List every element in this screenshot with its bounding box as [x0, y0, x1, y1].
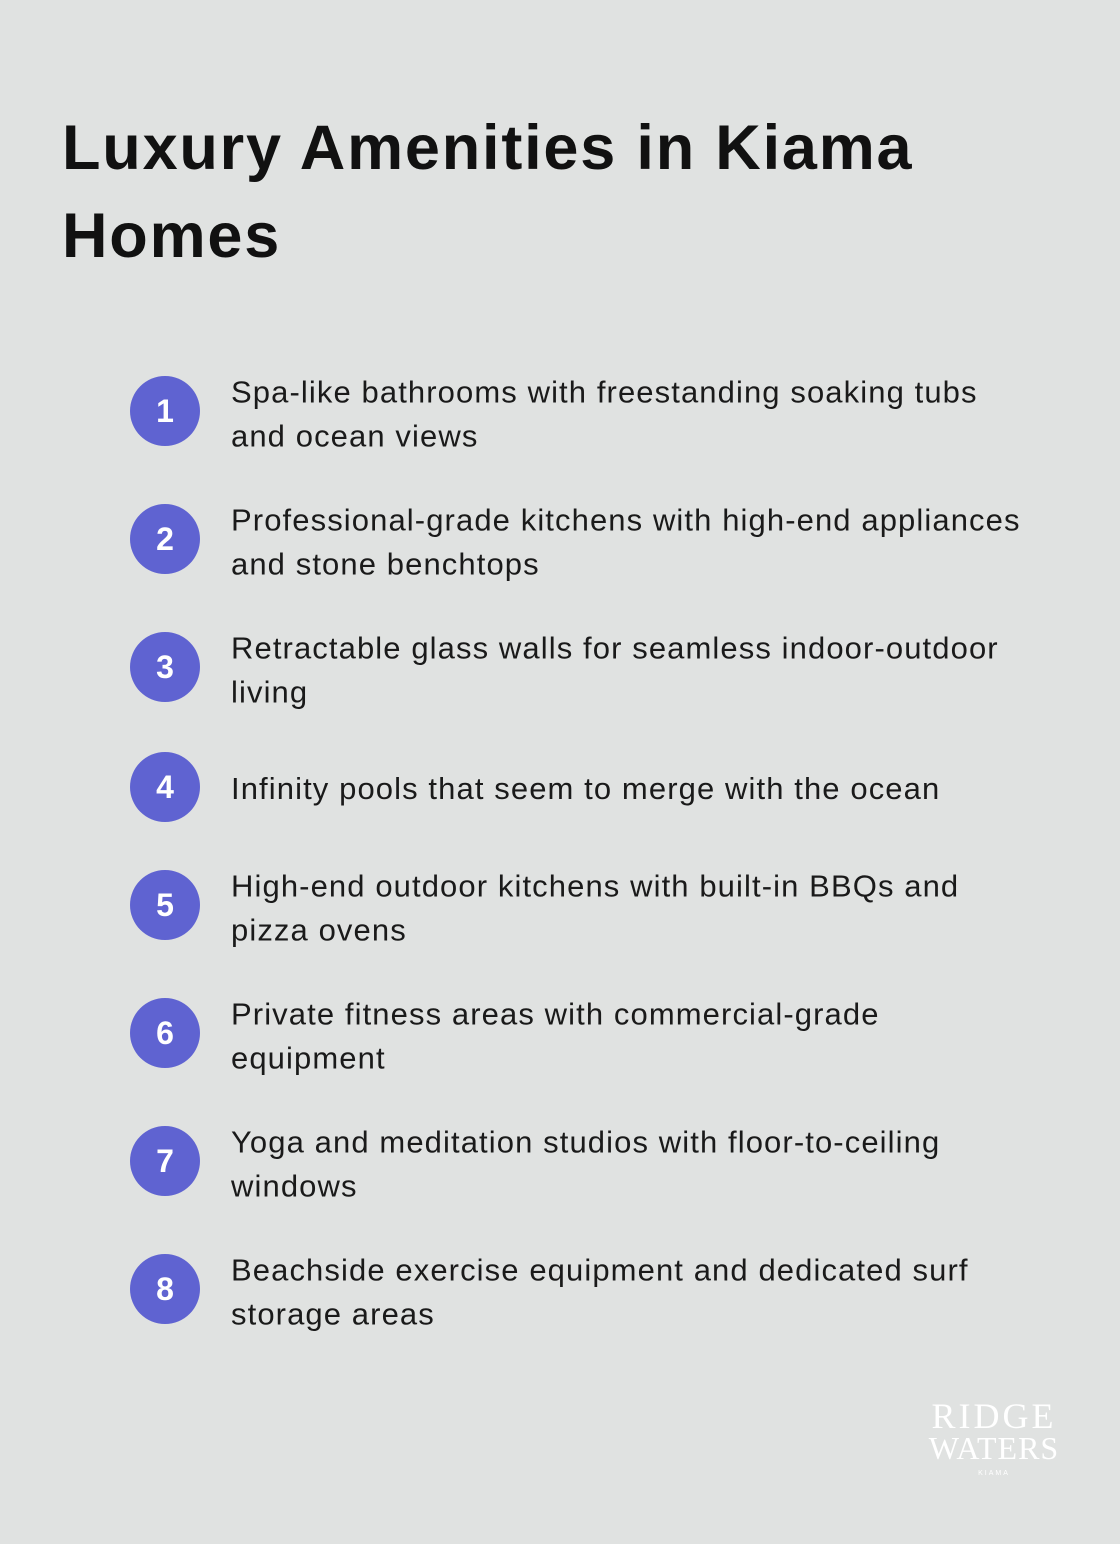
- item 3: [130, 631, 999, 710]
- item 2: 2: [156, 521, 174, 557]
- item 5: pizza ovens: [231, 913, 407, 948]
- title: Luxury Amenities in Kiama: [62, 113, 913, 183]
- item 7: windows: [231, 1169, 358, 1204]
- item 4: 4: [156, 769, 174, 805]
- title: Homes: [62, 201, 281, 271]
- logo: KIAMA: [978, 1470, 1010, 1477]
- logo: [928, 1396, 1059, 1477]
- item 6: 6: [156, 1015, 174, 1051]
- item 5: 5: [156, 887, 174, 923]
- item 5: High-end outdoor kitchens with built-in BBQs and: [231, 869, 959, 904]
- logo: WATERS: [929, 1430, 1059, 1466]
- item 7: Yoga and meditation studios with floor-to-ceiling: [231, 1125, 940, 1160]
- logo: RIDGE: [932, 1396, 1056, 1436]
- item 6: [130, 997, 880, 1076]
- item 2: [130, 503, 1021, 582]
- item 5: [130, 869, 959, 948]
- item 4: [130, 752, 940, 822]
- item 7: [130, 1125, 940, 1204]
- item 2: and stone benchtops: [231, 547, 540, 582]
- item 8: 8: [156, 1271, 174, 1307]
- item 3: 3: [156, 649, 174, 685]
- item 8: [130, 1253, 969, 1332]
- item 1: Spa-like bathrooms with freestanding soaking tubs: [231, 375, 978, 410]
- item 6: Private fitness areas with commercial-grade: [231, 997, 880, 1032]
- item 8: Beachside exercise equipment and dedicated surf: [231, 1253, 969, 1288]
- item 6: equipment: [231, 1041, 386, 1076]
- item 1: [130, 375, 978, 454]
- item 4: Infinity pools that seem to merge with the ocean: [231, 771, 940, 806]
- title: [62, 113, 913, 271]
- item 1: 1: [156, 393, 174, 429]
- item 2: Professional-grade kitchens with high-end appliances: [231, 503, 1021, 538]
- item 8: storage areas: [231, 1297, 435, 1332]
- item 1: and ocean views: [231, 419, 478, 454]
- item 3: living: [231, 675, 308, 710]
- item 7: 7: [156, 1143, 174, 1179]
- item 3: Retractable glass walls for seamless indoor-outdoor: [231, 631, 999, 666]
